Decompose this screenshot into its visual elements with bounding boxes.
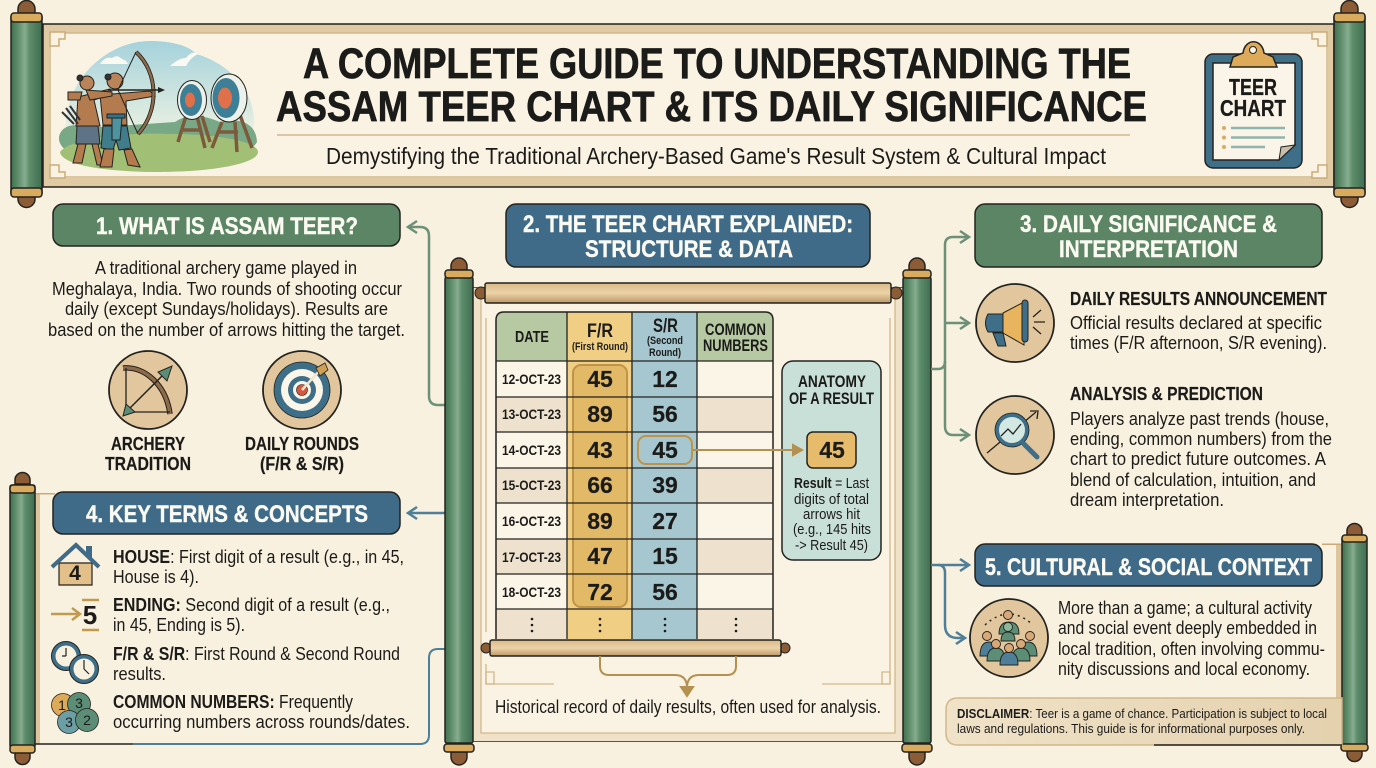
text: cultural context bbox=[1058, 598, 1325, 679]
table grid bbox=[496, 312, 773, 639]
row 18-oct: 72 bbox=[587, 579, 613, 605]
row 14-oct: 14-OCT-23 bbox=[502, 443, 561, 458]
label: daily rounds: DAILY ROUNDS bbox=[245, 433, 359, 454]
row 13-oct: 56 bbox=[652, 401, 678, 427]
disclaimer: DISCLAIMER: Teer is a game of chance. Participation is subject to local bbox=[957, 706, 1327, 721]
row 18-oct bbox=[502, 579, 678, 605]
row 16-oct: 27 bbox=[652, 508, 678, 534]
text: analysis and prediction: ANALYSIS & PREDICTION bbox=[1070, 384, 1263, 404]
anatomy of a result callout: arrows hit bbox=[803, 507, 860, 523]
term: ending bbox=[51, 595, 390, 635]
title bbox=[276, 41, 1147, 131]
heading 5 bbox=[975, 544, 1322, 586]
left roller bbox=[444, 258, 474, 765]
row 15-oct bbox=[502, 472, 678, 498]
term: common numbers coins: 3 bbox=[75, 695, 83, 711]
heading 2: STRUCTURE & DATA bbox=[585, 236, 793, 263]
label: archery tradition bbox=[105, 433, 191, 474]
teer results table bbox=[496, 312, 773, 639]
label: archery tradition: ARCHERY bbox=[111, 433, 186, 454]
text: cultural context: More than a game; a cultural activity bbox=[1058, 598, 1312, 618]
table header bbox=[496, 312, 773, 361]
term: house: HOUSE: First digit of a result (e.g., in 45, bbox=[113, 547, 404, 567]
heading 2: 2. THE TEER CHART EXPLAINED: bbox=[523, 211, 853, 238]
row 18-oct: 56 bbox=[652, 579, 678, 605]
term: ending: ENDING: Second digit of a result (e.g., bbox=[113, 595, 390, 615]
term: common numbers coins: 2 bbox=[83, 712, 91, 728]
anatomy of a result callout: 45 bbox=[819, 437, 845, 463]
icon: teer chart clipboard: CHART bbox=[1220, 95, 1286, 121]
arrow: chart to section 1 bbox=[408, 221, 445, 405]
intro text bbox=[48, 258, 405, 340]
row 12-oct bbox=[502, 366, 678, 392]
text: daily results announcement: Official results declared at specific bbox=[1070, 313, 1322, 333]
row 16-oct: 16-OCT-23 bbox=[502, 514, 561, 529]
term: first and second round clocks: results. bbox=[113, 664, 166, 684]
chart caption: Historical record of daily results, often used for analysis. bbox=[495, 697, 881, 717]
row 13-oct: 89 bbox=[587, 401, 613, 427]
anatomy of a result callout: digits of total bbox=[794, 492, 869, 508]
table header: (Second bbox=[647, 335, 683, 347]
text: cultural context: local tradition, often involving commu- bbox=[1058, 639, 1325, 659]
row 15-oct: 39 bbox=[652, 472, 678, 498]
anatomy of a result callout: -> Result 45) bbox=[795, 538, 868, 554]
row 15-oct: 66 bbox=[587, 472, 613, 498]
icon: megaphone bbox=[976, 284, 1054, 362]
intro text: A traditional archery game played in bbox=[95, 258, 357, 278]
intro text: based on the number of arrows hitting the target. bbox=[48, 320, 405, 340]
heading 5: 5. CULTURAL & SOCIAL CONTEXT bbox=[985, 554, 1312, 581]
icon: magnifier with trend bbox=[976, 396, 1054, 474]
table header: (First Round) bbox=[572, 341, 628, 353]
term: common numbers coins bbox=[52, 692, 410, 734]
table rows background bbox=[496, 361, 773, 639]
row continuation dots bbox=[531, 618, 737, 632]
row 14-oct: 45 bbox=[652, 437, 678, 463]
panel: 1. what is assam teer bbox=[48, 204, 405, 474]
text: cultural context: and social event deeply embedded in bbox=[1058, 618, 1317, 638]
targets bbox=[178, 116, 210, 148]
text: analysis and prediction: chart to predict future outcomes. A bbox=[1070, 449, 1326, 469]
illustration: archers and targets bbox=[59, 41, 258, 172]
term: first and second round clocks: F/R & S/R: First Round & Second Round bbox=[113, 644, 400, 664]
panel: teer chart scroll bbox=[444, 258, 932, 765]
bottom rod bbox=[481, 640, 790, 656]
title: A COMPLETE GUIDE TO UNDERSTANDING THE bbox=[303, 41, 1131, 88]
term: common numbers coins: 3 bbox=[65, 714, 73, 730]
icon: teer chart clipboard bbox=[1205, 42, 1302, 168]
text: analysis and prediction: ending, common numbers) from the bbox=[1070, 429, 1332, 449]
table header: DATE bbox=[515, 329, 549, 346]
row 12-oct: 12 bbox=[652, 366, 678, 392]
row 13-oct: 13-OCT-23 bbox=[502, 407, 561, 422]
row 14-oct: 43 bbox=[587, 437, 613, 463]
anatomy of a result callout: Result = Last bbox=[794, 476, 869, 492]
row 17-oct: 47 bbox=[587, 543, 613, 569]
text: daily results announcement: DAILY RESULTS ANNOUNCEMENT bbox=[1070, 289, 1327, 309]
subtitle: Demystifying the Traditional Archery-Based Game's Result System & Cultural Impact bbox=[326, 143, 1107, 169]
arrow: bracket to caption bbox=[600, 656, 736, 696]
heading 3: 3. DAILY SIGNIFICANCE & bbox=[1020, 211, 1277, 238]
heading 3: INTERPRETATION bbox=[1059, 236, 1238, 263]
icon: bow and arrow bbox=[109, 351, 187, 429]
row 17-oct: 17-OCT-23 bbox=[502, 550, 561, 565]
anatomy of a result callout: (e.g., 145 hits bbox=[793, 522, 871, 538]
heading 3 bbox=[975, 204, 1322, 267]
anatomy of a result callout: ANATOMY bbox=[798, 373, 866, 391]
title: ASSAM TEER CHART & ITS DAILY SIGNIFICANCE bbox=[276, 84, 1147, 131]
bow and arrow bbox=[136, 52, 154, 134]
term: ending: 5 bbox=[83, 600, 97, 630]
text: analysis and prediction: blend of calculation, intuition, and bbox=[1070, 470, 1316, 490]
back archer bbox=[62, 75, 112, 165]
disclaimer bbox=[946, 698, 1342, 745]
text: analysis and prediction bbox=[1070, 384, 1332, 510]
row 16-oct bbox=[502, 508, 678, 534]
text: analysis and prediction: Players analyze past trends (house, bbox=[1070, 409, 1329, 429]
label: daily rounds bbox=[245, 433, 359, 474]
term: house: 4 bbox=[69, 562, 81, 585]
panel: 4. key terms scroll bbox=[10, 472, 410, 765]
arrows: chart to section 3 bbox=[931, 231, 969, 441]
table header: S/R bbox=[653, 316, 678, 337]
row 13-oct bbox=[502, 401, 678, 427]
right roller bbox=[902, 258, 932, 765]
top rod bbox=[475, 283, 902, 303]
text: daily results announcement: times (F/R afternoon, S/R evening). bbox=[1070, 333, 1327, 353]
intro text: daily (except Sundays/holidays). Results are bbox=[65, 299, 388, 319]
term: house: House is 4). bbox=[113, 567, 199, 587]
text: analysis and prediction: dream interpretation. bbox=[1070, 490, 1224, 510]
heading 1 bbox=[53, 204, 400, 246]
row 12-oct: 45 bbox=[587, 366, 613, 392]
intro text: Meghalaya, India. Two rounds of shooting occur bbox=[52, 279, 402, 299]
connector: chart to key terms bbox=[133, 649, 445, 744]
row 17-oct bbox=[502, 543, 678, 569]
table header: F/R bbox=[587, 321, 613, 342]
row 12-oct: 12-OCT-23 bbox=[502, 372, 561, 387]
term: house bbox=[52, 545, 404, 587]
panel: 3. daily significance bbox=[975, 204, 1332, 510]
icon: teer chart clipboard: TEER bbox=[1229, 74, 1277, 100]
arrow: chart to section 4 bbox=[408, 507, 445, 519]
heading 2 bbox=[506, 204, 870, 267]
row 14-oct bbox=[502, 437, 678, 463]
table header: COMMON bbox=[705, 320, 766, 339]
term: ending: in 45, Ending is 5). bbox=[113, 615, 245, 635]
row 17-oct: 15 bbox=[652, 543, 678, 569]
anatomy of a result callout: OF A RESULT bbox=[789, 390, 874, 408]
header scroll banner bbox=[11, 1, 1365, 208]
table header: Round) bbox=[649, 347, 681, 359]
highlight: s/r 45 bbox=[638, 436, 692, 464]
icon: target bbox=[263, 351, 341, 429]
row 15-oct: 15-OCT-23 bbox=[502, 478, 561, 493]
text: daily results announcement bbox=[1070, 289, 1327, 353]
term: common numbers coins: COMMON NUMBERS: Frequently bbox=[113, 692, 353, 712]
icon: community group bbox=[970, 599, 1048, 677]
term: common numbers coins: occurring numbers across rounds/dates. bbox=[113, 712, 410, 732]
row 16-oct: 89 bbox=[587, 508, 613, 534]
term: first and second round clocks bbox=[52, 642, 400, 684]
table header: NUMBERS bbox=[703, 336, 768, 355]
heading 1: 1. WHAT IS ASSAM TEER? bbox=[96, 213, 358, 240]
term: common numbers coins: 1 bbox=[58, 697, 66, 713]
disclaimer: laws and regulations. This guide is for informational purposes only. bbox=[957, 721, 1305, 736]
anatomy of a result callout bbox=[782, 361, 881, 560]
heading 4: 4. KEY TERMS & CONCEPTS bbox=[86, 501, 368, 528]
arrows: chart to section 5 bbox=[931, 559, 969, 644]
arrow: result to anatomy bbox=[693, 445, 802, 455]
row 18-oct: 18-OCT-23 bbox=[502, 585, 561, 600]
front archer bbox=[86, 73, 155, 167]
label: daily rounds: (F/R & S/R) bbox=[260, 453, 344, 474]
heading 4 bbox=[53, 492, 400, 534]
text: cultural context: nity discussions and local economy. bbox=[1058, 659, 1310, 679]
label: archery tradition: TRADITION bbox=[105, 453, 191, 474]
panel: 5. cultural and social context bbox=[946, 524, 1368, 762]
